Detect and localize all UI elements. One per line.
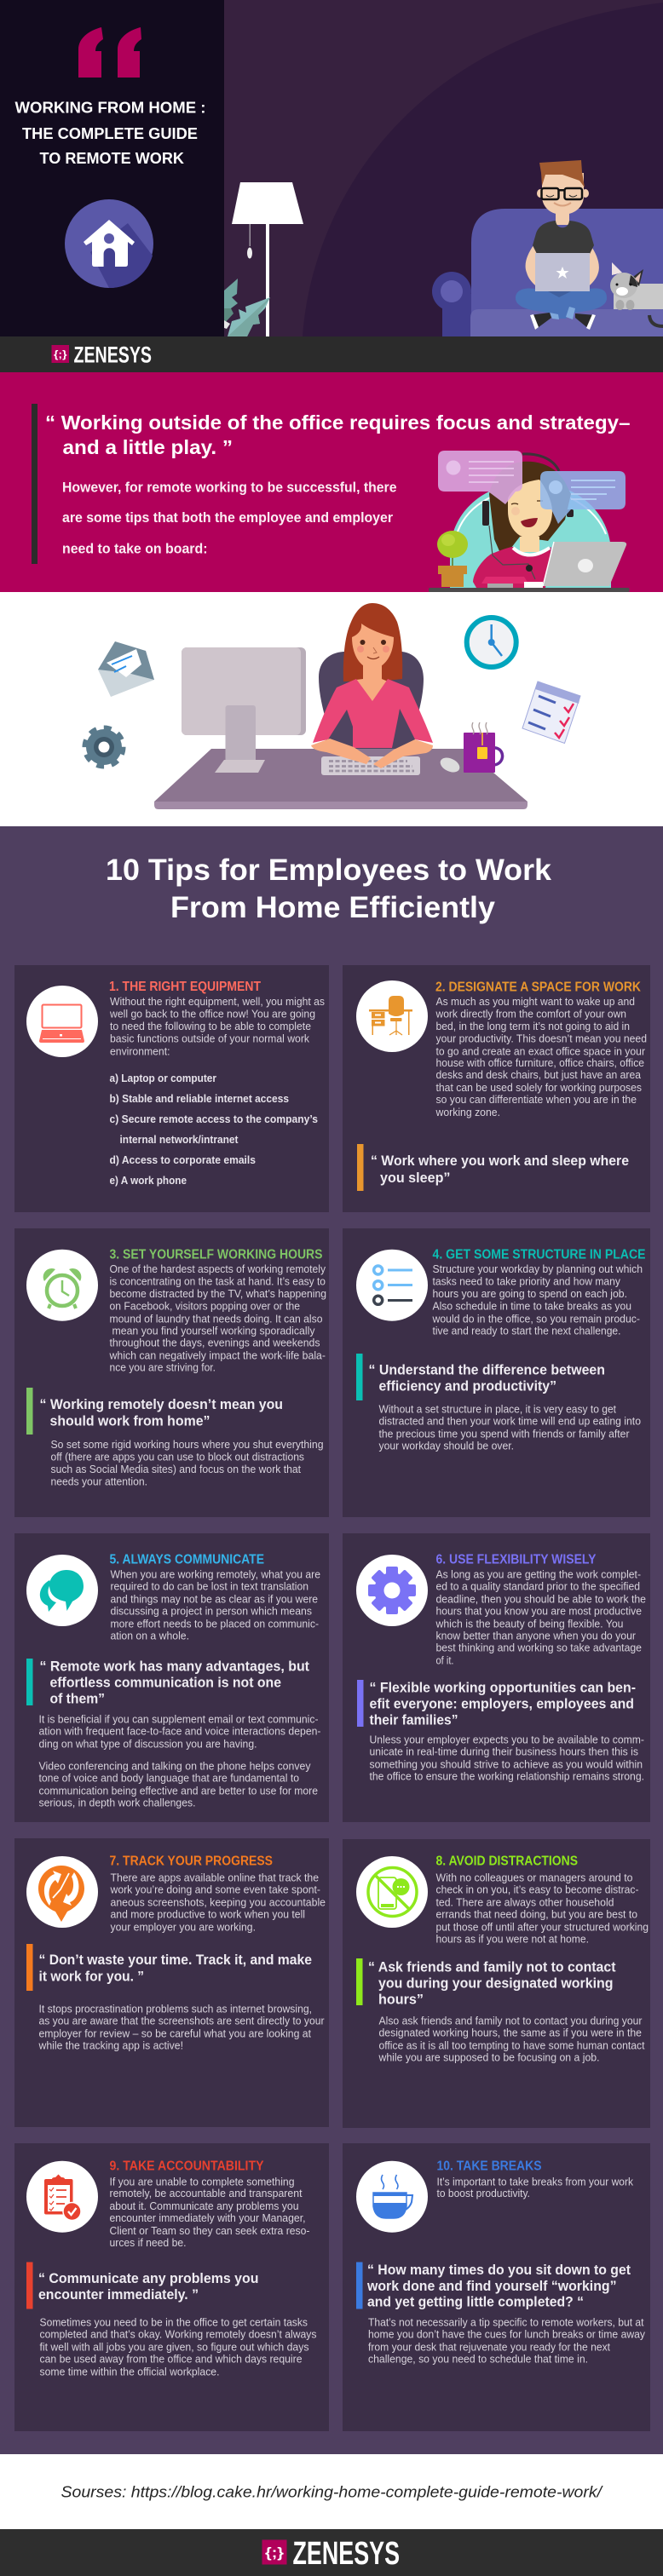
illustration: woman with headset <box>429 451 629 592</box>
cat <box>610 262 663 326</box>
icon: alarm clock <box>26 1250 98 1321</box>
body text: tive and ready to start the next challenge. <box>433 1325 620 1337</box>
supporting text: fit well with all jobs you are given, so figure out which days <box>39 2342 308 2354</box>
heading: 2. DESIGNATE A SPACE FOR WORK <box>435 980 642 994</box>
supporting text: home you don’t have the cues for lunch breaks or time away <box>368 2329 646 2341</box>
pull quote: and yet getting little completed? “ <box>367 2295 584 2310</box>
body text: It’s important to take breaks from your work <box>436 2176 634 2188</box>
heading: 1. THE RIGHT EQUIPMENT <box>109 980 261 994</box>
supporting text: ation with frequent face-to-face and voice interactions depen- <box>39 1725 320 1737</box>
intro text: However, for remote working to be successful, there <box>62 479 397 496</box>
pull quote <box>26 1944 312 1991</box>
body text: about it. Communicate any problems you <box>109 2200 299 2212</box>
supporting text <box>38 2003 324 2051</box>
body text: hours as if you were not at home. <box>436 1933 589 1945</box>
body text: is concentrating on the task at hand. It’s easy to <box>109 1275 326 1287</box>
body text: aneous screenshots, keeping you accountable <box>111 1896 326 1908</box>
heading: 10. TAKE BREAKS <box>436 2159 542 2173</box>
body text: mean you find yourself working sporadically <box>112 1325 315 1337</box>
equipment list <box>109 1072 318 1187</box>
body text: and more productive to work when you tell <box>111 1908 305 1920</box>
body text: and things may not be as clear as if you were <box>111 1593 318 1605</box>
pull quote: “ Don’t waste your time. Track it, and make <box>39 1952 312 1968</box>
body text: tasks need to take priority and how many <box>433 1275 621 1287</box>
pull quote: “ Communicate any problems you <box>38 2271 259 2286</box>
sources panel <box>0 2454 663 2529</box>
heading: 6. USE FLEXIBILITY WISELY <box>436 1552 597 1567</box>
body text: environment: <box>110 1045 170 1057</box>
body text: house with office furniture, office chairs, office <box>436 1057 644 1069</box>
supporting text: That’s not necessarily a tip specific to remote workers, but at <box>368 2317 644 2329</box>
pull quote: “ How many times do you sit down to get <box>367 2263 631 2278</box>
pull quote: “ Understand the difference between <box>368 1362 605 1377</box>
supporting text: challenge, so you need to schedule that time in. <box>368 2354 588 2366</box>
body text <box>109 1263 326 1373</box>
body text: Also schedule in time to take breaks as you <box>433 1300 631 1312</box>
supporting text <box>39 1713 320 1808</box>
section title <box>106 854 552 924</box>
intro text: are some tips that both the employee and employer <box>62 509 393 526</box>
supporting text: the office to ensure the working relationship remains strong. <box>370 1770 644 1782</box>
body text: more effort needs to be placed on communic- <box>111 1618 319 1630</box>
body text: desks and desk chairs, but just have an area <box>436 1069 641 1081</box>
intro text: need to take on board: <box>62 540 208 557</box>
pull quote <box>26 1659 309 1706</box>
panel: tip 6 <box>343 1533 650 1822</box>
sofa <box>432 209 663 336</box>
section title: From Home Efficiently <box>170 891 496 924</box>
body text: best thinking and working so take advantage <box>436 1642 642 1653</box>
supporting text: some time within the official workplace. <box>39 2366 220 2378</box>
panel: tip 4 <box>343 1228 650 1517</box>
body text: basic functions outside of your normal work <box>110 1032 310 1044</box>
title: TO REMOTE WORK <box>39 149 185 167</box>
icon: gear <box>84 727 124 767</box>
pull quote: their families” <box>370 1712 458 1728</box>
body text: which can negatively impact the work-life bala- <box>109 1349 326 1361</box>
pull quote <box>356 1958 616 2007</box>
logo bar <box>0 336 663 372</box>
supporting text: Sometimes you need to be in the office to get certain tasks <box>39 2317 308 2329</box>
pull quote: “ Working remotely doesn’t mean you <box>39 1397 283 1412</box>
intro quote: and a little play. ” <box>63 436 233 458</box>
body text <box>432 1263 643 1337</box>
supporting text: your workday should be over. <box>378 1440 514 1452</box>
supporting text: Video conferencing and talking on the phone helps convey <box>39 1760 311 1772</box>
body text: to boost productivity. <box>436 2188 530 2199</box>
pull quote: “ Remote work has many advantages, but <box>39 1659 309 1674</box>
floor lamp <box>232 182 303 336</box>
body text: mound of laundry that needs doing. It can also <box>109 1313 323 1325</box>
body text: discussing a project in person which means <box>111 1605 312 1617</box>
body text: As long as you are getting the work complet- <box>436 1568 641 1580</box>
body text <box>436 1872 649 1945</box>
pull quote: hours” <box>378 1992 424 2007</box>
icon: mouse <box>438 755 462 775</box>
body text: urces if need be. <box>109 2237 186 2249</box>
pull quote: work done and find yourself “working” <box>366 2279 617 2294</box>
panel: tip 7 <box>14 1838 329 2127</box>
body text: check in on you, it’s easy to become distrac- <box>436 1883 639 1895</box>
icon: coffee cup <box>356 2161 428 2233</box>
logo bar: ZENESYS <box>73 342 152 368</box>
supporting text: from your desk that rejuvenate you ready for the next <box>368 2342 611 2354</box>
equipment list: c) Secure remote access to the company’s <box>109 1113 318 1125</box>
header panel <box>0 0 663 372</box>
left title panel <box>0 0 224 336</box>
title: WORKING FROM HOME : <box>15 99 206 116</box>
heading: 8. AVOID DISTRACTIONS <box>436 1854 578 1868</box>
body text: bed, in the long term it’s not going to aid in <box>436 1021 630 1032</box>
supporting text <box>370 1734 644 1782</box>
body text: so you can differentiate when you are in the <box>436 1094 637 1106</box>
panel: tip 8 <box>343 1839 650 2128</box>
body text: Client or Team so they can seek extra reso- <box>109 2225 310 2237</box>
supporting text <box>368 2317 646 2366</box>
pull quote: “ Work where you work and sleep where <box>371 1153 629 1169</box>
pull quote <box>26 2263 259 2309</box>
magenta intro panel <box>0 372 663 592</box>
supporting text: can be used away from the office and which days require <box>39 2354 303 2366</box>
supporting text: tone of voice and body language that are fundamental to <box>39 1772 299 1784</box>
body text: One of the hardest aspects of working remotely <box>109 1263 326 1275</box>
illustration: woman at desk <box>154 603 528 809</box>
pull quote: you sleep” <box>380 1170 450 1186</box>
heading: 3. SET YOURSELF WORKING HOURS <box>109 1247 322 1262</box>
supporting text: such as Social Media sites) and focus on the work that <box>51 1463 302 1475</box>
body text: to go and create an exact office space in your <box>436 1045 645 1057</box>
body text: There are apps available online that track the <box>111 1872 319 1883</box>
body text <box>110 1872 326 1933</box>
icon: laptop <box>26 986 98 1057</box>
supporting text: communication being effective and are better to use for more <box>39 1785 318 1797</box>
body text: work directly from the comfort of your own <box>435 1008 626 1020</box>
body text <box>109 2176 310 2249</box>
body text: Without the right equipment, well, you might as <box>110 996 325 1008</box>
body text: required to do can be lost in text translation <box>111 1580 308 1592</box>
supporting text: off (there are apps you can use to block out distractions <box>51 1451 304 1463</box>
body text: When you are working remotely, what you are <box>111 1568 320 1580</box>
icon: clock <box>467 618 516 667</box>
body text: With no colleagues or managers around to <box>436 1872 633 1883</box>
supporting text: ding on what type of discussion you are having. <box>39 1738 257 1750</box>
heading: 7. TRACK YOUR PROGRESS <box>109 1854 273 1868</box>
body text <box>111 1568 320 1642</box>
pull quote <box>357 1144 629 1191</box>
footer logo bar <box>0 2529 663 2576</box>
supporting text: It stops procrastination problems such as internet browsing, <box>39 2003 312 2015</box>
section title: 10 Tips for Employees to Work <box>106 854 552 887</box>
icon: no phone <box>356 1856 428 1928</box>
icon: task list <box>356 1250 428 1321</box>
pull quote: it work for you. ” <box>39 1969 144 1984</box>
icon: progress pin <box>26 1856 98 1928</box>
body text: ation on a whole. <box>111 1630 189 1642</box>
pull quote: encounter immediately. ” <box>38 2287 199 2303</box>
body text: remotely, be accountable and transparent <box>109 2188 303 2199</box>
body text: on Facebook, visitors popping over or the <box>109 1300 300 1312</box>
intro quote <box>45 411 631 458</box>
supporting text: Unless your employer expects you to be available to comm- <box>370 1734 644 1745</box>
heading: 9. TAKE ACCOUNTABILITY <box>109 2159 264 2173</box>
icon: clipboard <box>26 2161 98 2233</box>
pull quote: should work from home” <box>49 1413 210 1429</box>
title <box>15 99 206 167</box>
heading: 4. GET SOME STRUCTURE IN PLACE <box>433 1247 646 1262</box>
pull quote: efit everyone: employers, employees and <box>370 1696 634 1711</box>
supporting text: something you should strive to achieve as you would within <box>370 1758 643 1770</box>
body text: that can be used solely for working purposes <box>436 1082 642 1094</box>
body text: throughout the days, evenings and weekends <box>109 1337 320 1348</box>
body text: your employer you are working. <box>111 1921 256 1933</box>
body text: which is the beauty of being flexible. You <box>435 1618 624 1630</box>
supporting text: distracted and then your work time will end up eating into <box>378 1415 641 1427</box>
body text: hours you are going to spend on each job. <box>433 1288 627 1300</box>
title: THE COMPLETE GUIDE <box>22 124 198 142</box>
icon: gear <box>356 1555 428 1626</box>
body text: your productivity. This doesn’t mean you need <box>436 1032 647 1044</box>
icon: envelope <box>98 641 154 697</box>
supporting text: while you are supposed to be focusing on a job. <box>378 2051 600 2063</box>
white illustration panel <box>0 592 663 826</box>
pull quote: effortless communication is not one <box>49 1675 281 1690</box>
body text: encounter immediately with your Manager, <box>109 2212 305 2224</box>
footer logo bar: {;} <box>265 2544 284 2561</box>
supporting text: office as it is all too tempting to have some human contact <box>378 2039 645 2051</box>
tips section background <box>0 826 663 2454</box>
body text: know better than anyone when you do your <box>436 1630 636 1642</box>
pull quote: “ Flexible working opportunities can ben- <box>370 1680 636 1695</box>
icon: desk <box>356 980 428 1052</box>
icon: quotation mark <box>78 27 141 78</box>
body text: put those off until after your structured working <box>436 1921 649 1933</box>
supporting text <box>51 1439 324 1487</box>
supporting text: unicate in real-time during their business hours then this is <box>370 1745 638 1757</box>
body text: become distracted by the TV, what’s happening <box>109 1288 326 1300</box>
equipment list: b) Stable and reliable internet access <box>109 1093 289 1105</box>
panel: tip 5 <box>14 1533 329 1822</box>
body text: work you’re doing and some even take spont- <box>110 1883 320 1895</box>
body text <box>109 996 325 1057</box>
man with laptop <box>516 160 607 330</box>
supporting text: the precious time you spend with friends or family after <box>378 1428 629 1440</box>
panel: tip 2 <box>343 965 650 1212</box>
supporting text: So set some rigid working hours where you shut everything <box>51 1439 324 1451</box>
body text: ted. There are always other household <box>436 1896 614 1908</box>
body text: ed to a quality standard prior to the specified <box>436 1580 640 1592</box>
body text: If you are unable to complete something <box>109 2176 295 2188</box>
supporting text: Also ask friends and family not to contact you during your <box>378 2015 643 2027</box>
body text: errands that need doing, but you are best to <box>436 1908 637 1920</box>
equipment list: e) A work phone <box>109 1175 187 1187</box>
intro quote: “ Working outside of the office requires focus and strategy– <box>45 411 631 434</box>
pull quote: efficiency and productivity” <box>378 1378 556 1394</box>
equipment list: internal network/intranet <box>119 1134 239 1146</box>
icon: chat bubbles <box>26 1555 98 1626</box>
body text <box>435 1568 646 1666</box>
pull quote <box>356 2263 631 2310</box>
logo bar: {;} <box>54 348 67 360</box>
footer logo bar: ZENESYS <box>293 2536 400 2572</box>
supporting text: as you are aware that the screenshots are sent directly to your <box>39 2015 324 2027</box>
pull quote: of them” <box>49 1691 105 1706</box>
supporting text: employer for review – so be careful what you are looking at <box>39 2027 312 2039</box>
supporting text: serious, in depth work challenges. <box>39 1797 196 1808</box>
pull quote: “ Ask friends and family not to contact <box>368 1959 616 1975</box>
supporting text <box>378 2015 645 2063</box>
supporting text: It is beneficial if you can supplement email or text communic- <box>39 1713 319 1725</box>
supporting text <box>378 1403 641 1452</box>
panel: tip 9 <box>14 2143 329 2431</box>
icon: house badge <box>65 199 153 288</box>
pull quote <box>26 1388 283 1435</box>
body text: to need the following to be able to complete <box>110 1021 311 1032</box>
body text: As much as you might want to wake up and <box>436 996 635 1008</box>
supporting text: needs your attention. <box>51 1475 147 1487</box>
supporting text: Without a set structure in place, it is very easy to get <box>378 1403 617 1415</box>
supporting text: while the tracking app is active! <box>38 2039 183 2051</box>
supporting text: completed and that’s okay. Working remotely doesn’t always <box>39 2329 317 2341</box>
heading: 5. ALWAYS COMMUNICATE <box>109 1552 264 1567</box>
equipment list: a) Laptop or computer <box>109 1072 216 1084</box>
supporting text <box>39 2317 317 2378</box>
body text: nce you are striving for. <box>109 1361 216 1373</box>
body text: would do in the office, so you remain produc- <box>432 1313 640 1325</box>
intro text <box>62 479 397 557</box>
body text: working zone. <box>435 1107 500 1118</box>
body text: deadline, then you should be able to work the <box>436 1593 646 1605</box>
body text: Structure your workday by planning out which <box>433 1263 643 1275</box>
body text: of it. <box>436 1654 453 1666</box>
panel: tip 10 <box>343 2143 650 2431</box>
pull quote <box>357 1680 636 1728</box>
body text <box>436 2176 634 2199</box>
panel: tip 1 <box>14 965 329 1212</box>
plant <box>224 279 270 336</box>
equipment list: d) Access to corporate emails <box>109 1154 256 1166</box>
pull quote <box>356 1354 605 1400</box>
pull quote: you during your designated working <box>378 1975 614 1991</box>
panel: tip 3 <box>14 1228 329 1517</box>
icon: mug <box>464 722 503 773</box>
body text: well go back to the office now! You are going <box>109 1008 315 1020</box>
supporting text: designated working hours, the same as if you were in the <box>378 2027 642 2038</box>
body text: hours that you know you are most productive <box>436 1605 642 1617</box>
sources panel: Sourses: https://blog.cake.hr/working-home-complete-guide-remote-work/ <box>61 2484 603 2501</box>
icon: checklist <box>522 681 580 743</box>
body text <box>435 996 647 1118</box>
